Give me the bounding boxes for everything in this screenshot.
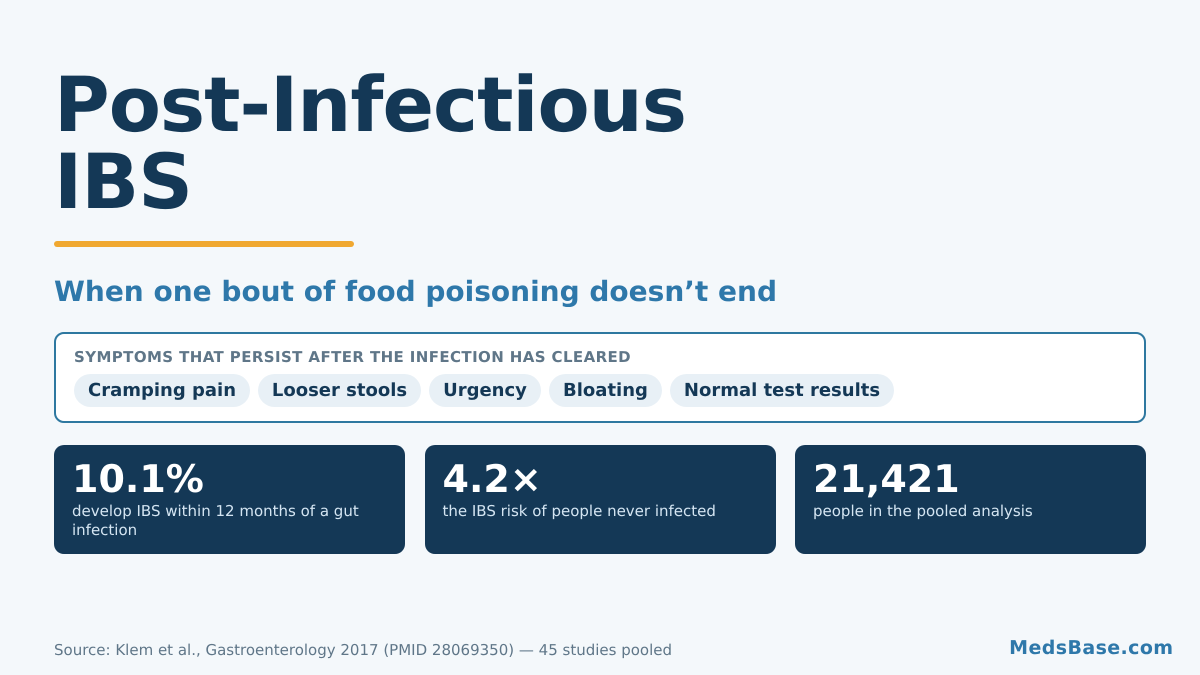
stat number: 21,421 bbox=[813, 457, 960, 501]
source note: Source: Klem et al., Gastroenterology 2017 (PMID 28069350) — 45 studies pooled bbox=[54, 640, 672, 658]
chip: looser stools: Looser stools bbox=[272, 380, 407, 401]
chip: urgency: Urgency bbox=[443, 380, 527, 401]
title bbox=[54, 60, 686, 226]
stat number: 4.2× bbox=[442, 457, 542, 501]
brand: MedsBase.com bbox=[1009, 637, 1174, 659]
chip: looser stools bbox=[258, 374, 421, 407]
title: IBS bbox=[54, 137, 192, 226]
stat label: people in the pooled analysis bbox=[813, 502, 1033, 520]
chip: normal test results: Normal test results bbox=[684, 380, 880, 401]
panel: symptoms bbox=[54, 332, 1146, 423]
chip: cramping pain: Cramping pain bbox=[88, 380, 236, 401]
chip: normal test results bbox=[670, 374, 894, 407]
stat label: infection bbox=[72, 521, 137, 539]
symptoms heading: SYMPTOMS THAT PERSIST AFTER THE INFECTION HAS CLEARED bbox=[74, 348, 631, 366]
subtitle: When one bout of food poisoning doesn’t end bbox=[54, 275, 777, 308]
accent bar bbox=[54, 241, 354, 247]
title: Post-Infectious bbox=[54, 60, 686, 149]
chip: bloating bbox=[549, 374, 662, 407]
stat label: develop IBS within 12 months of a gut bbox=[72, 502, 359, 520]
stat label: the IBS risk of people never infected bbox=[442, 502, 716, 520]
stat number: 10.1% bbox=[72, 457, 204, 501]
chip: cramping pain bbox=[74, 374, 250, 407]
stat label bbox=[72, 502, 359, 539]
stat card: 4.2x bbox=[424, 445, 776, 554]
chip: bloating: Bloating bbox=[563, 380, 648, 401]
stat card: 21,421 bbox=[795, 445, 1146, 554]
chip: urgency bbox=[429, 374, 541, 407]
stat card: 10.1% bbox=[54, 445, 405, 554]
